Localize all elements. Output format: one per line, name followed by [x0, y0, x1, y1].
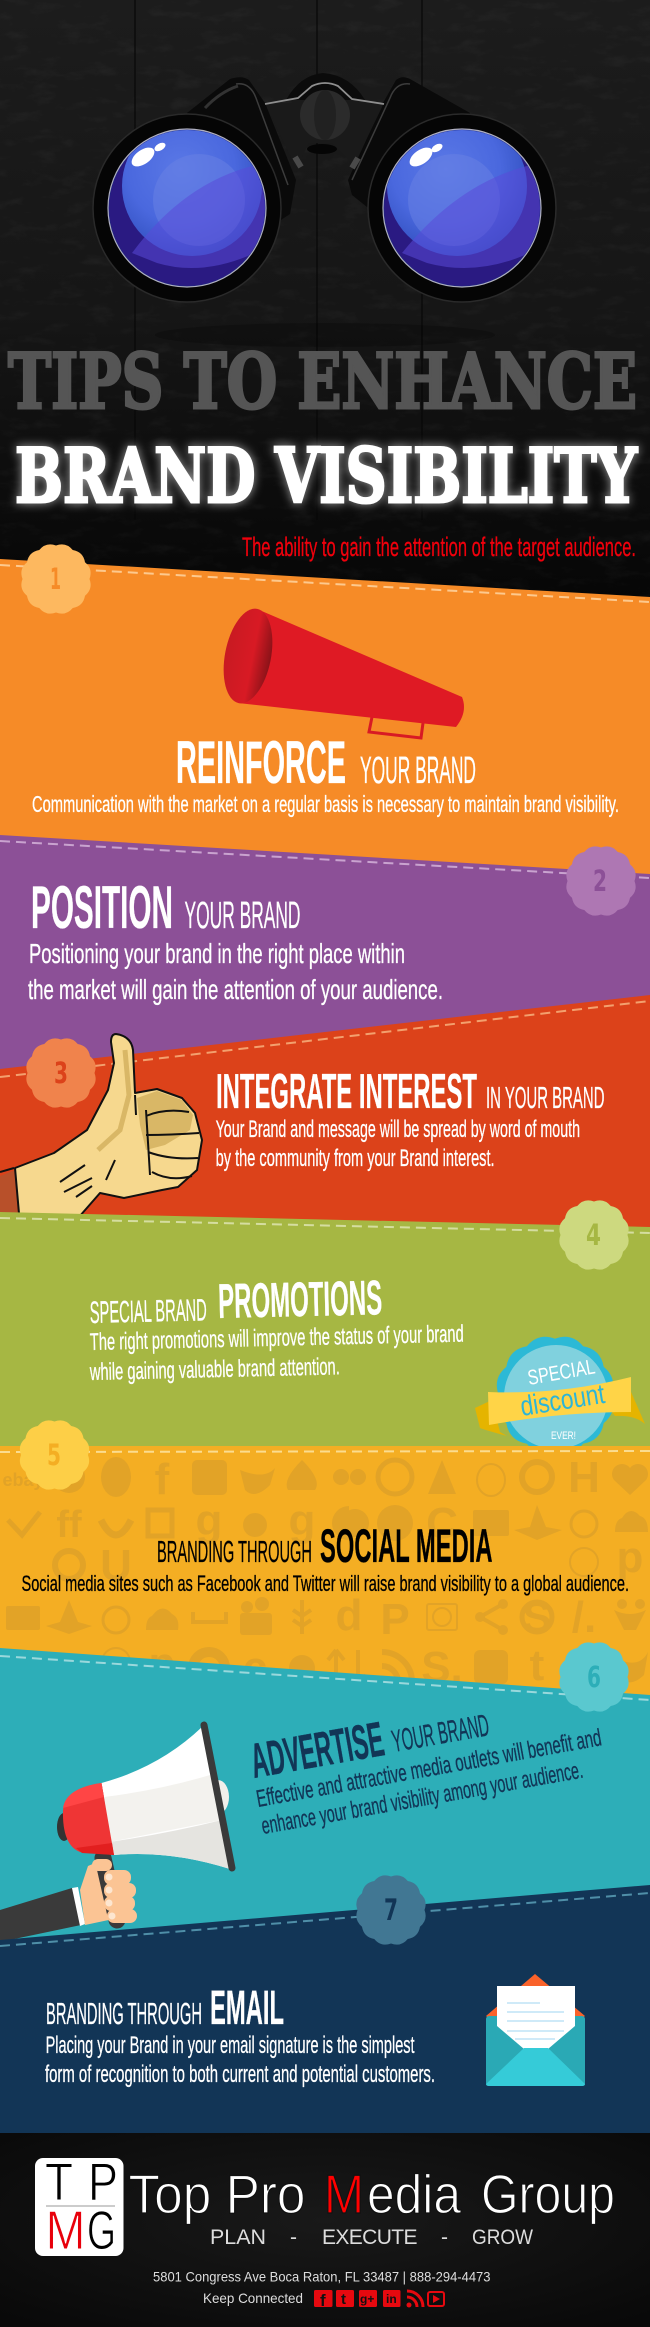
body text: while gaining valuable brand attention.	[89, 1353, 340, 1386]
social icon watermark pattern: p	[149, 1639, 175, 1688]
body text	[28, 938, 443, 1005]
company name: Top Pro	[128, 2163, 306, 2225]
slogan	[210, 2226, 533, 2249]
panel: advertise your brand	[0, 1642, 650, 1990]
badge 6	[559, 1642, 629, 1712]
panel: advertise your brand: ADVERTISE	[247, 1712, 388, 1789]
panel: reinforce your brand	[0, 544, 650, 900]
social icon watermark pattern: c	[243, 1643, 267, 1692]
social icon watermark pattern: ff	[56, 1504, 82, 1546]
social icons row: g+	[360, 2292, 374, 2306]
social icon watermark pattern: H	[568, 1453, 600, 1502]
panel: special brand promotions: SPECIAL BRAND	[89, 1292, 207, 1330]
badge 2: 2	[593, 864, 607, 898]
company name: edia	[367, 2163, 461, 2225]
social icon watermark pattern: d	[336, 1591, 362, 1640]
handle	[103, 1858, 117, 1920]
badge 1	[21, 544, 91, 614]
badge 7: 7	[384, 1893, 398, 1927]
body text	[216, 1116, 580, 1172]
logo mark TPMG: P	[88, 2153, 118, 2212]
palm	[80, 1860, 118, 1925]
social icons row: f	[320, 2291, 326, 2310]
icon: binoculars	[93, 73, 556, 302]
address: 5801 Congress Ave Boca Raton, FL 33487 | 888-294-4473	[153, 2268, 491, 2284]
badge 4	[559, 1200, 629, 1270]
logo mark TPMG	[35, 2153, 124, 2261]
social icon watermark pattern: C	[426, 1499, 458, 1548]
slogan: GROW	[472, 2226, 533, 2249]
body text: Placing your Brand in your email signature is the simplest	[46, 2032, 415, 2059]
social icon watermark pattern: p	[617, 1533, 643, 1582]
megaphone back	[57, 1813, 71, 1841]
binocular body	[187, 73, 470, 240]
panel: special brand promotions	[0, 1200, 650, 1500]
social icon watermark pattern: S	[522, 1593, 552, 1642]
panel: social media	[0, 1420, 650, 1720]
slogan: PLAN	[210, 2226, 266, 2249]
social icon watermark pattern: ebay	[2, 1470, 44, 1490]
sleeve	[0, 1888, 81, 1942]
social icon watermark pattern: S.	[421, 1643, 463, 1692]
slogan: -	[290, 2226, 297, 2249]
panel: position your brand: YOUR BRAND	[184, 895, 300, 937]
social icon watermark pattern: P	[380, 1595, 410, 1644]
icon: special discount badge	[475, 1337, 645, 1453]
panel: reinforce your brand: REINFORCE	[176, 729, 346, 796]
social icon watermark pattern: /.	[572, 1593, 596, 1642]
badge 5: 5	[47, 1438, 61, 1472]
company name	[128, 2163, 615, 2225]
badge 6: 6	[587, 1660, 601, 1694]
social icon watermark pattern: t	[530, 1641, 545, 1690]
slogan: EXECUTE	[322, 2226, 418, 2249]
panel: position your brand	[0, 835, 650, 1200]
social icon watermark pattern: g	[289, 1496, 315, 1545]
fingers	[92, 1859, 112, 1871]
left lens	[93, 114, 281, 302]
panel: branding through email	[0, 1875, 650, 2134]
panel: integrate interest	[0, 995, 650, 1300]
icon: red megaphone	[216, 604, 464, 738]
social icons row: in	[386, 2292, 397, 2306]
right lens	[368, 114, 556, 302]
social icon watermark pattern	[2, 1453, 648, 1692]
company name: M	[324, 2163, 364, 2225]
icon: special discount badge: discount	[518, 1378, 607, 1422]
badge 1: 1	[50, 562, 61, 596]
icon: special discount badge: EVER!	[551, 1430, 576, 1442]
panel: advertise your brand: YOUR BRAND	[389, 1707, 492, 1759]
panel: special brand promotions: PROMOTIONS	[218, 1271, 383, 1329]
company name: Group	[481, 2163, 615, 2225]
slogan: -	[441, 2226, 448, 2249]
body text	[89, 1321, 464, 1386]
keep connected: Keep Connected	[203, 2290, 303, 2306]
social icon watermark pattern: f	[155, 1455, 170, 1504]
icon: white megaphone in hand	[0, 1725, 232, 1942]
body text	[45, 2032, 435, 2088]
panel: branding through email: BRANDING THROUGH	[46, 1996, 202, 2031]
logo mark TPMG: M	[46, 2199, 86, 2261]
icon: thumbs up hand	[0, 1034, 202, 1225]
panel: position your brand: POSITION	[31, 874, 173, 941]
badge 3	[26, 1038, 96, 1108]
megaphone body	[102, 1727, 230, 1869]
social icon watermark pattern: U	[100, 1541, 132, 1590]
social icons row: t	[341, 2291, 346, 2308]
badge 5	[20, 1420, 89, 1490]
badge 2	[566, 846, 636, 916]
logo mark TPMG: T	[45, 2153, 73, 2212]
badge 3: 3	[54, 1056, 68, 1090]
icon: special discount badge: SPECIAL	[526, 1355, 597, 1390]
panel: footer	[0, 2133, 650, 2327]
badge 4: 4	[586, 1218, 601, 1252]
social icons row	[314, 2290, 444, 2310]
panel: branding through email: EMAIL	[210, 1982, 284, 2035]
body text: Positioning your brand in the right place within	[29, 938, 405, 969]
badge 7	[356, 1875, 426, 1945]
panel: social media: BRANDING THROUGH	[157, 1534, 312, 1569]
dark wood background	[0, 0, 650, 620]
panel: reinforce your brand: YOUR BRAND	[360, 750, 476, 792]
social icon watermark pattern: g	[196, 1496, 222, 1545]
icon: open envelope	[486, 1974, 585, 2086]
logo mark TPMG: G	[87, 2199, 116, 2261]
body text: the market will gain the attention of your audience.	[28, 974, 443, 1005]
